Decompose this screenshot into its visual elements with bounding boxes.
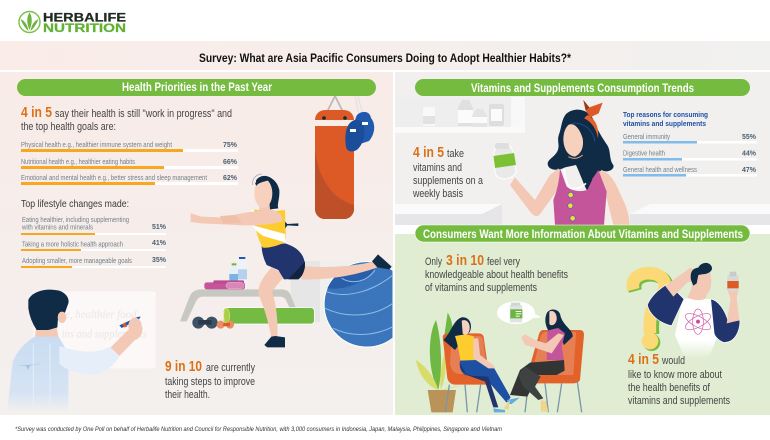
chart: top health goals: 62% xyxy=(223,173,237,182)
logo: Herbalife Nutrition xyxy=(19,12,126,35)
lower shelves xyxy=(395,204,770,225)
text: 4 in 5 would like to know more: would xyxy=(661,355,685,367)
head and hair xyxy=(255,177,279,209)
illustration: man with question mark xyxy=(633,263,740,358)
text: 4 in 5 take vitamins: supplements on a xyxy=(413,175,484,187)
chart: top health goals xyxy=(21,140,238,185)
chart: top reasons: Top reasons for consuming xyxy=(623,110,708,119)
dumbbells xyxy=(192,317,234,329)
neck xyxy=(259,202,272,213)
question mark xyxy=(633,273,667,351)
right chair xyxy=(525,330,584,412)
foam roller xyxy=(223,308,314,324)
left woman xyxy=(443,317,520,412)
chart: lifestyle changes: Adopting smaller, more manageable goals xyxy=(22,258,132,265)
text: 4 in 5 take vitamins: take xyxy=(447,148,464,160)
chart: top health goals: Emotional and mental health e.g., better stress and sleep management xyxy=(21,175,207,182)
text: 4 in 5 would like to know more: the health benefits of xyxy=(628,382,711,394)
white tee xyxy=(675,298,720,358)
hair xyxy=(28,290,69,330)
chart: lifestyle changes: 51% xyxy=(152,222,166,231)
chart: lifestyle changes: 41% xyxy=(152,238,166,247)
chart: top reasons: vitamins and supplements xyxy=(623,119,706,128)
illustration: two women talking xyxy=(416,301,584,412)
text: 4 in 5 would like to know more: 4 in 5 xyxy=(628,351,659,368)
arms xyxy=(510,168,560,216)
text: 4 in 5 health goals xyxy=(21,104,232,133)
logo: Herbalife Nutrition: NUTRITION xyxy=(43,23,126,35)
chart: lifestyle changes: 35% xyxy=(152,255,166,264)
back leg xyxy=(302,262,377,279)
chart: top reasons: Digestive health xyxy=(623,150,665,158)
plant xyxy=(416,313,463,412)
title band: Survey: What are Asia Pacific Consumers Doing to Adopt Healthier Habits?* xyxy=(199,51,571,65)
text: 4 in 5 would like to know more xyxy=(628,351,730,407)
chart: top reasons xyxy=(623,110,757,176)
text: only 3 in 10: 3 in 10 xyxy=(446,252,484,269)
chart: top reasons: 55% xyxy=(742,132,756,141)
whiteboard xyxy=(33,292,156,368)
title band xyxy=(0,41,770,70)
top xyxy=(253,209,286,248)
sleeve and arm xyxy=(59,346,119,374)
right woman xyxy=(503,310,573,412)
chart: top health goals: Physical health e.g., healthier immune system and weight xyxy=(21,142,172,149)
text: 4 in 5 health goals: say their health is still "work in progress" and xyxy=(55,108,232,120)
shorts xyxy=(262,243,305,279)
text: only 3 in 10: of vitamins and supplements xyxy=(425,282,537,294)
pill heading: more information xyxy=(415,225,750,242)
chart: lifestyle changes xyxy=(21,217,166,268)
text: 4 in 5 take vitamins: 4 in 5 xyxy=(413,144,444,161)
chart: top health goals: 75% xyxy=(223,140,237,149)
chart: lifestyle changes: Eating healthier, including supplementing xyxy=(22,217,129,224)
hair xyxy=(548,110,614,190)
text: 4 in 5 health goals: the top health goals are: xyxy=(21,121,116,133)
pill heading: consumption trends: Vitamins and Supplements Consumption Trends xyxy=(471,83,694,95)
shirt body xyxy=(7,336,68,412)
text: only 3 in 10: Only xyxy=(425,256,442,268)
bench xyxy=(180,289,296,321)
text: only 3 in 10: knowledgeable about health benefits xyxy=(425,269,568,281)
chart: top reasons: 47% xyxy=(742,165,756,174)
face xyxy=(563,124,583,157)
text: 9 in 10: their health. xyxy=(165,389,210,401)
text: 4 in 5 would like to know more: like to know more about xyxy=(628,369,722,381)
pill heading: health priorities: Health Priorities in the Past Year xyxy=(122,82,272,94)
whiteboard script: e, healthier food xyxy=(65,307,138,321)
dress xyxy=(553,168,607,225)
panel: health priorities xyxy=(0,72,393,415)
atom graphic xyxy=(683,309,713,334)
text: 4 in 5 health goals: 4 in 5 xyxy=(21,104,52,121)
other arm xyxy=(727,288,739,323)
chart: top reasons: 44% xyxy=(742,148,756,158)
pill heading: consumption trends xyxy=(415,79,750,96)
chart: lifestyle changes: with vitamins and minerals xyxy=(21,224,93,232)
icon: supplement bottle xyxy=(494,143,516,179)
right sleeve xyxy=(711,299,740,342)
panel: consumption trends xyxy=(395,72,770,225)
text: 4 in 5 take vitamins: weekly basis xyxy=(412,188,463,200)
footnote: *Survey was conducted by One Poll on behalf of Herbalife Nutrition and Council for Responsible Nutrition, with 3,000 consumers in Indonesia, Japan, Malaysia, Philippines, Singapore and Vietnam xyxy=(15,426,502,433)
marker xyxy=(119,317,141,328)
text: only 3 in 10 xyxy=(425,252,568,294)
arms xyxy=(191,210,282,225)
text: 9 in 10: are currently xyxy=(206,362,255,374)
illustration: exercising woman with gym gear xyxy=(180,174,393,347)
left chair xyxy=(443,333,488,412)
panel: more information xyxy=(395,225,770,415)
whiteboard script xyxy=(62,307,147,340)
hair xyxy=(691,263,712,286)
chart: top health goals: 66% xyxy=(223,157,237,166)
pill heading: health priorities xyxy=(17,79,376,96)
raised arm xyxy=(665,268,697,297)
text: 4 in 5 would like to know more: vitamins and supplements xyxy=(628,395,730,407)
bandana xyxy=(583,100,603,138)
water bottles xyxy=(229,257,247,289)
shelf with bottles xyxy=(395,97,525,133)
illustration: man writing on whiteboard xyxy=(7,290,156,412)
speech bubble xyxy=(497,301,541,324)
front leg xyxy=(259,267,285,337)
gym box backdrop xyxy=(291,261,360,322)
text: only 3 in 10: feel very xyxy=(487,256,520,268)
icon: punching bag and gloves xyxy=(315,96,374,219)
neck xyxy=(35,327,58,337)
text: 9 in 10: 9 in 10 xyxy=(165,358,202,375)
chart: lifestyle changes: Taking a more holistic health approach xyxy=(22,242,123,248)
ponytail xyxy=(285,222,298,228)
chart: top health goals: Nutritional health e.g., healthier eating habits xyxy=(21,159,135,166)
chart: top reasons: General health and wellness xyxy=(623,167,697,174)
logo: Herbalife Nutrition: HERBALIFE xyxy=(43,12,126,24)
text: 9 in 10 xyxy=(165,358,255,401)
left sleeve xyxy=(647,283,684,326)
text: 4 in 5 take vitamins: vitamins and xyxy=(413,162,462,174)
heading: top lifestyle changes: Top lifestyle changes made: xyxy=(21,198,129,210)
whiteboard script: ins and supplements xyxy=(62,326,147,340)
illustration: woman holding supplement bottle xyxy=(510,100,629,225)
icon: orange bottle xyxy=(727,272,739,291)
text: 9 in 10: taking steps to improve xyxy=(165,376,255,388)
buttons xyxy=(568,192,575,221)
head and neck xyxy=(687,272,711,300)
exercise ball xyxy=(324,262,393,347)
chart: top reasons: General immunity xyxy=(623,134,670,141)
towel xyxy=(204,280,245,289)
text: 4 in 5 take vitamins xyxy=(412,144,484,200)
